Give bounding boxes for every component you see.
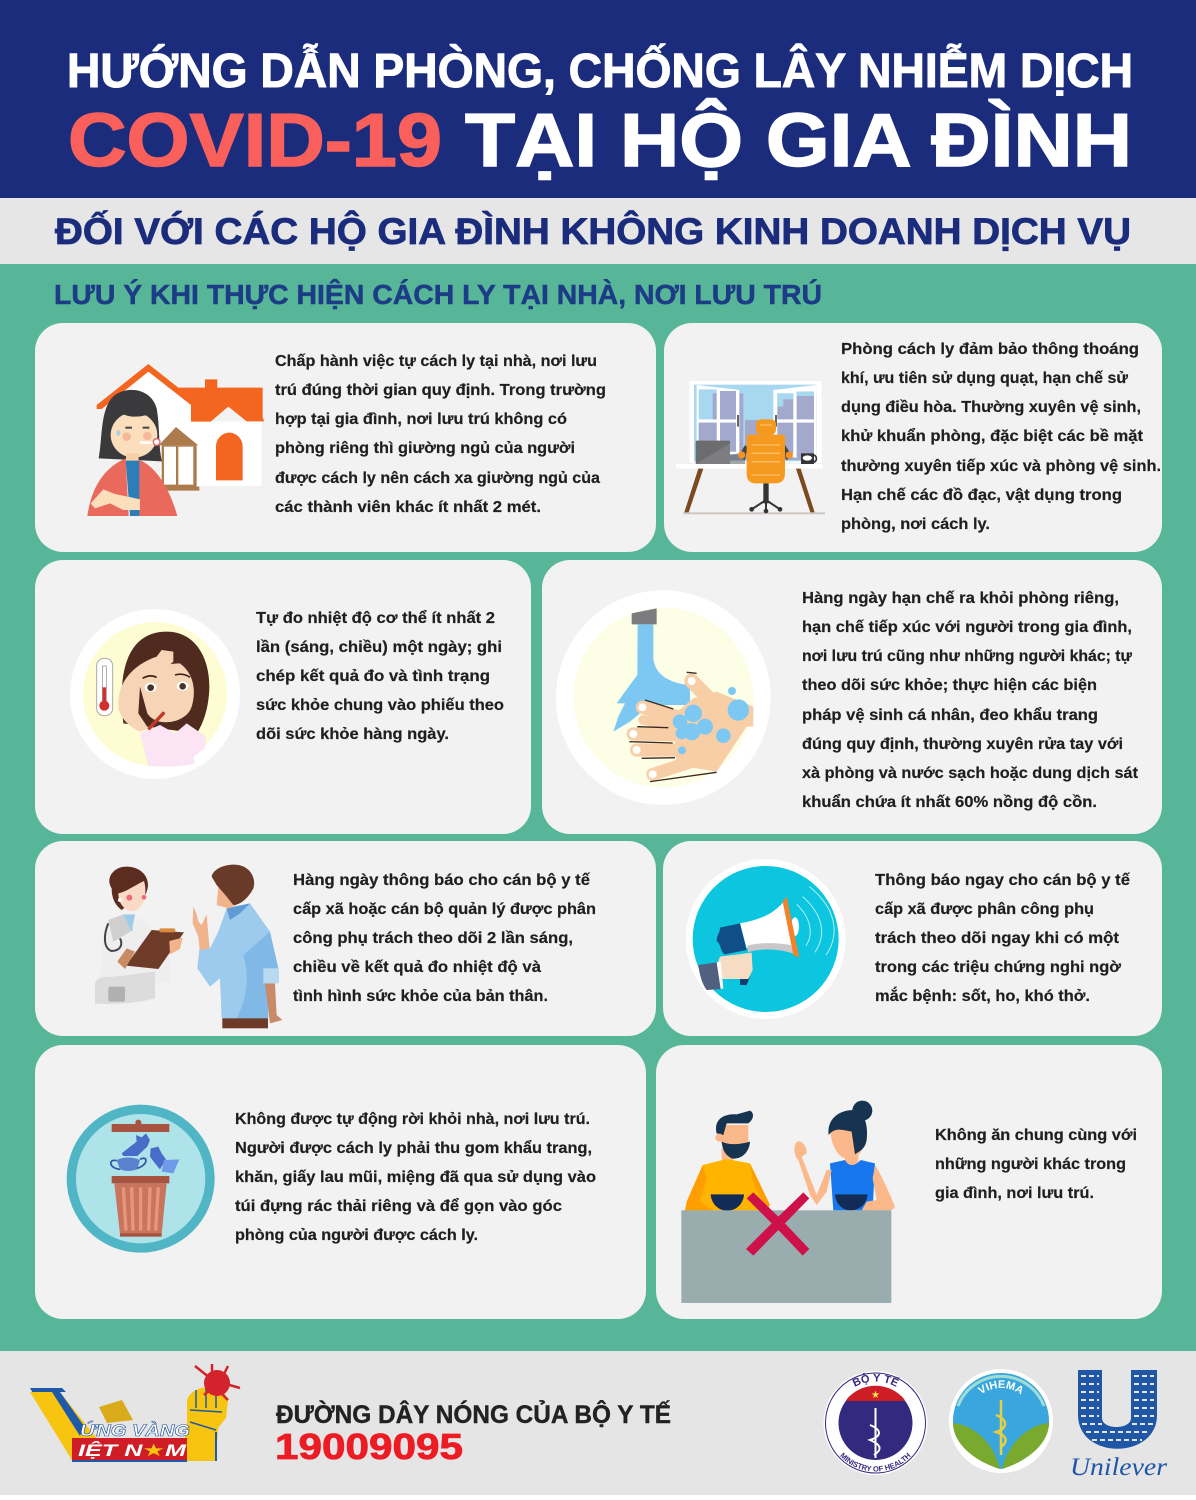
- text: daily report: tình hình sức khỏe của bản thân.: [293, 988, 548, 1005]
- text: do not eat together: [935, 1127, 1137, 1202]
- logo: Ministry of Health: MINISTRY OF HEALTH: [840, 1452, 911, 1472]
- text: limit contact: Hàng ngày hạn chế ra khỏi phòng riêng,: [802, 590, 1119, 607]
- text: isolation room: khí, ưu tiên sử dụng quạt, hạn chế sử: [841, 370, 1129, 387]
- text: daily report: công phụ trách theo dõi 2 lần sáng,: [293, 930, 573, 947]
- title: tại hộ gia đình: TẠI HỘ GIA ĐÌNH: [465, 98, 1132, 182]
- text: limit contact: đúng quy định, thường xuyên rửa tay với: [802, 736, 1123, 753]
- text: isolation room: [841, 341, 1161, 533]
- text: limit contact: hạn chế tiếp xúc với người trong gia đình,: [802, 619, 1132, 636]
- logo: Vững Vàng Việt Nam: [30, 1364, 240, 1461]
- text: waste disposal: khăn, giấy lau mũi, miệng đã qua sử dụng vào: [235, 1169, 596, 1186]
- text: limit contact: theo dõi sức khỏe; thực hiện các biện: [802, 677, 1097, 694]
- text: do not eat together: Không ăn chung cùng với: [935, 1127, 1137, 1144]
- panel: self isolation at home: [35, 323, 656, 552]
- text: waste disposal: Người được cách ly phải thu gom khẩu trang,: [235, 1140, 592, 1157]
- hotline label: ĐƯỜNG DÂY NÓNG CỦA BỘ Y TẾ: [276, 1399, 671, 1429]
- panel: daily report: [35, 841, 656, 1036]
- title line 1: HƯỚNG DẪN PHÒNG, CHỐNG LÂY NHIỄM DỊCH: [67, 43, 1133, 98]
- text: daily report: chiều về kết quả đo nhiệt độ và: [293, 959, 541, 976]
- text: waste disposal: [235, 1111, 596, 1244]
- icon: washing hands: [556, 590, 771, 805]
- text: waste disposal: túi đựng rác thải riêng và để gọn vào góc: [235, 1198, 562, 1215]
- icon: megaphone: [686, 859, 846, 1019]
- logo: VIHEMA: [949, 1369, 1053, 1473]
- text: self isolation: [275, 353, 606, 516]
- panel: temperature check: [35, 560, 531, 834]
- header band: [0, 0, 1196, 198]
- panel: report symptoms: [663, 841, 1162, 1036]
- text: report symptoms: cấp xã được phân công phụ: [875, 901, 1094, 918]
- text: self isolation: phòng riêng thì giường ngủ của người: [275, 440, 575, 457]
- text: isolation room: Phòng cách ly đảm bảo thông thoáng: [841, 341, 1139, 358]
- text: self isolation: được cách ly nên cách xa giường ngủ của: [275, 470, 600, 487]
- text: limit contact: pháp vệ sinh cá nhân, đeo khẩu trang: [802, 707, 1098, 724]
- logo: VIHEMA: VIHEMA: [977, 1380, 1022, 1394]
- text: limit contact: khuẩn chứa ít nhất 60% nồng độ cồn.: [802, 794, 1097, 811]
- text: self isolation: hợp tại gia đình, nơi lưu trú không có: [275, 411, 567, 428]
- icon: two people at a table with cross: [681, 1101, 895, 1303]
- icon: trash bin with mask and gloves: [67, 1105, 215, 1253]
- text: waste disposal: phòng của người được cách ly.: [235, 1227, 478, 1244]
- text: do not eat together: gia đình, nơi lưu trú.: [935, 1185, 1094, 1202]
- logo: Ministry of Health: [824, 1371, 928, 1475]
- text: temperature check: sức khỏe chung vào phiếu theo: [256, 697, 504, 714]
- text: waste disposal: Không được tự động rời khỏi nhà, nơi lưu trú.: [235, 1111, 590, 1128]
- text: limit contact: [802, 590, 1138, 811]
- text: daily report: Hàng ngày thông báo cho cán bộ y tế: [293, 872, 590, 889]
- text: report symptoms: mắc bệnh: sốt, ho, khó thở.: [875, 987, 1090, 1005]
- text: limit contact: xà phòng và nước sạch hoặc dung dịch sát: [802, 765, 1138, 782]
- icon: doctor and patient: [95, 865, 282, 1028]
- text: temperature check: lần (sáng, chiều) một ngày; ghi: [256, 639, 502, 656]
- green background: [0, 264, 1196, 1351]
- footer band: [0, 1351, 1196, 1495]
- text: report symptoms: trong các triệu chứng nghi ngờ: [875, 959, 1122, 976]
- text: isolation room: khử khuẩn phòng, đặc biệt các bề mặt: [841, 428, 1143, 445]
- title: COVID-19: COVID-19: [68, 98, 442, 182]
- logo: Ministry of Health: ★: [871, 1390, 880, 1401]
- text: self isolation: các thành viên khác ít nhất 2 mét.: [275, 499, 541, 516]
- text: report symptoms: trách theo dõi ngay khi có một: [875, 930, 1119, 947]
- logo: Vững Vàng Việt Nam: IỆT N ★ M: [78, 1441, 187, 1460]
- text: limit contact: nơi lưu trú cũng như những người khác; tự: [802, 648, 1133, 665]
- text: report symptoms: Thông báo ngay cho cán bộ y tế: [875, 872, 1130, 889]
- subtitle band: ĐỐI VỚI CÁC HỘ GIA ĐÌNH KHÔNG KINH DOANH DỊCH VỤ: [55, 210, 1131, 252]
- text: self isolation: trú đúng thời gian quy định. Trong trường: [275, 382, 606, 399]
- text: temperature check: [256, 610, 504, 743]
- text: daily report: cấp xã hoặc cán bộ quản lý được phân: [293, 901, 596, 918]
- text: temperature check: chép kết quả đo và tình trạng: [256, 668, 490, 685]
- logo: Ministry of Health: BỘ Y TẾ: [852, 1372, 900, 1387]
- panel: waste disposal: [35, 1045, 646, 1319]
- text: isolation room: Hạn chế các đồ đạc, vật dụng trong: [841, 487, 1122, 504]
- icon: woman with thermometer: [70, 609, 240, 779]
- logo: Vững Vàng Việt Nam: ỨNG VÀNG: [80, 1421, 190, 1440]
- text: self isolation: Chấp hành việc tự cách ly tại nhà, nơi lưu: [275, 353, 597, 370]
- section heading: LƯU Ý KHI THỰC HIỆN CÁCH LY TẠI NHÀ, NƠI LƯU TRÚ: [54, 279, 822, 310]
- text: isolation room: thường xuyên tiếp xúc và phòng vệ sinh.: [841, 458, 1161, 475]
- icon: desk by open window: [676, 381, 825, 514]
- logo: Unilever: Unilever: [1070, 1454, 1167, 1481]
- text: daily report: [293, 872, 596, 1005]
- text: do not eat together: những người khác trong: [935, 1156, 1126, 1173]
- icon: sick woman and house: [87, 364, 264, 516]
- text: isolation room: phòng, nơi cách ly.: [841, 516, 990, 533]
- logo: Unilever: [1070, 1370, 1167, 1481]
- text: temperature check: Tự đo nhiệt độ cơ thể ít nhất 2: [256, 610, 495, 627]
- subtitle band: [0, 198, 1196, 264]
- panel: isolation room: [664, 323, 1162, 552]
- text: temperature check: dõi sức khỏe hàng ngày.: [256, 726, 449, 743]
- text: report symptoms: [875, 872, 1130, 1005]
- text: isolation room: dụng điều hòa. Thường xuyên vệ sinh,: [841, 399, 1141, 416]
- panel: do not eat together: [656, 1045, 1162, 1319]
- hotline number: 19009095: [275, 1426, 463, 1467]
- panel: limit contact: [542, 560, 1162, 834]
